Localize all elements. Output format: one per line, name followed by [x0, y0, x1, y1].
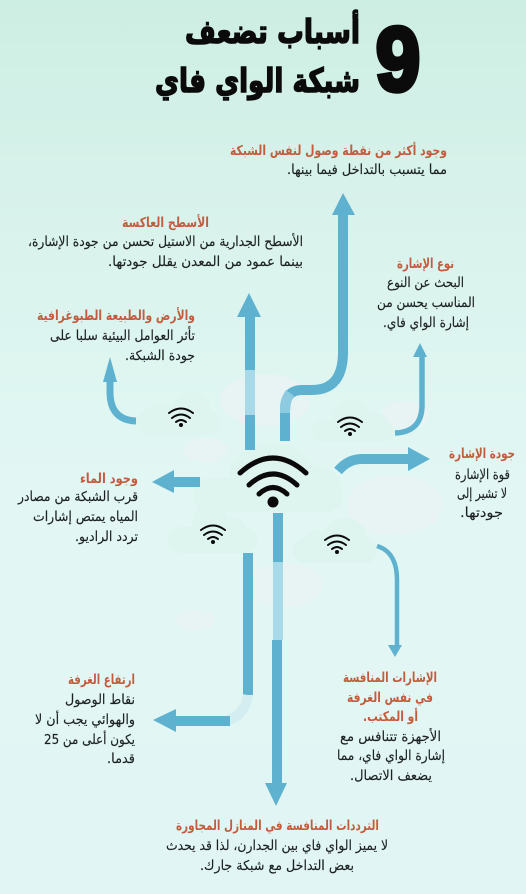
text block: presence of water: [17, 471, 138, 545]
icon: wifi top right: [338, 418, 362, 436]
text block: multiple access points: [230, 142, 447, 178]
text block: signal quality: جودتها.: [460, 505, 503, 521]
text block: reflective surfaces: الأسطح العاكسة: [122, 214, 209, 231]
arrow: down left: [153, 553, 248, 732]
text block: competing signals in the room: الأجهزة تتنافس مع: [340, 728, 441, 745]
text block: presence of water: المياه يمتص إشارات: [33, 509, 138, 525]
cloud: lower left: [168, 503, 257, 553]
text block: signal quality: [449, 446, 515, 521]
text block: signal quality: قوة الإشارة: [455, 467, 510, 483]
cloud: main: [193, 443, 343, 512]
icon: main wifi: [240, 458, 306, 508]
text block: signal type: نوع الإشارة: [397, 256, 454, 272]
cloud: top left: [137, 392, 220, 435]
arrow: long up: [285, 193, 355, 441]
title: شبكة الواي فاي: [155, 61, 360, 101]
text block: competing signals in the room: أو المكتب.: [363, 708, 418, 725]
text block: competing frequencies in neighbouring homes: [166, 818, 388, 874]
text block: multiple access points: مما يتسبب بالتداخل فيما بينها.: [287, 162, 447, 178]
text block: signal type: إشارة الواي فاي.: [383, 315, 469, 331]
text block: signal type: البحث عن النوع: [387, 275, 464, 291]
arrow: small up left: [103, 357, 136, 421]
text block: competing signals in the room: في نفس الغرفة: [347, 690, 433, 706]
text block: room height: يكون أعلى من 25: [44, 730, 135, 748]
text block: signal type: [377, 256, 475, 331]
text block: terrain and nature: والأرض والطبيعة الطبوغرافية: [37, 307, 195, 324]
arrow: small up right: [395, 343, 427, 433]
text block: room height: والهوائي يجب أن لا: [35, 710, 135, 728]
arrow: second up: [237, 293, 261, 450]
text block: competing signals in the room: يضعف الاتصال.: [350, 768, 432, 784]
text block: reflective surfaces: بينما عمود من المعدن يقلل جودتها.: [108, 254, 303, 270]
text block: multiple access points: وجود أكثر من نقطة وصول لنفس الشبكة: [230, 142, 447, 159]
text block: room height: قدما.: [107, 751, 135, 767]
cloud: top right: [312, 400, 393, 442]
text block: presence of water: قرب الشبكة من مصادر: [17, 489, 138, 505]
text block: room height: [35, 672, 135, 767]
text block: room height: نقاط الوصول: [65, 692, 135, 708]
arrows: [103, 193, 430, 806]
arrow: right: [338, 447, 430, 471]
text block: terrain and nature: جودة الشبكة.: [125, 348, 195, 364]
title: [155, 10, 360, 101]
text block: terrain and nature: تأثر العوامل البيئية سلبا على: [50, 326, 195, 344]
text block: presence of water: تردد الراديو.: [75, 529, 138, 545]
text block: signal quality: لا تشير إلى: [457, 486, 507, 502]
title: أسباب تضعف: [185, 10, 360, 51]
text block: competing signals in the room: الإشارات المنافسة: [343, 670, 437, 686]
text block: competing frequencies in neighbouring homes: بعض التداخل مع شبكة جارك.: [200, 858, 354, 874]
clouds: [137, 392, 393, 563]
text block: competing signals in the room: [337, 670, 445, 784]
text block: terrain and nature: [37, 307, 195, 364]
cloud: lower right: [293, 518, 377, 563]
text block: reflective surfaces: [28, 214, 303, 270]
text block: room height: ارتفاع الغرفة: [68, 672, 135, 688]
icon: wifi lower left: [201, 526, 225, 544]
text block: reflective surfaces: الأسطح الجدارية من الاستيل تحسن من جودة الإشارة،: [28, 233, 303, 250]
arrow: left: [152, 470, 200, 493]
big number 9: 9: [376, 10, 420, 110]
text block: competing frequencies in neighbouring homes: لا يميز الواي فاي بين الجدارن، لذا قد يحدث: [166, 838, 388, 854]
icon: wifi top left: [169, 408, 193, 427]
icon: wifi lower right: [325, 536, 349, 554]
text block: competing frequencies in neighbouring homes: الترددات المنافسة في المنازل المجاورة: [176, 818, 379, 834]
arrow: down centre: [265, 513, 287, 806]
arrow: down right thin: [377, 546, 402, 657]
text block: presence of water: وجود الماء: [80, 471, 138, 487]
faint pink background clouds: [175, 374, 443, 630]
text block: signal type: المناسب يحسن من: [377, 295, 475, 311]
text block: competing signals in the room: إشارة الواي فاي، مما: [337, 748, 445, 764]
